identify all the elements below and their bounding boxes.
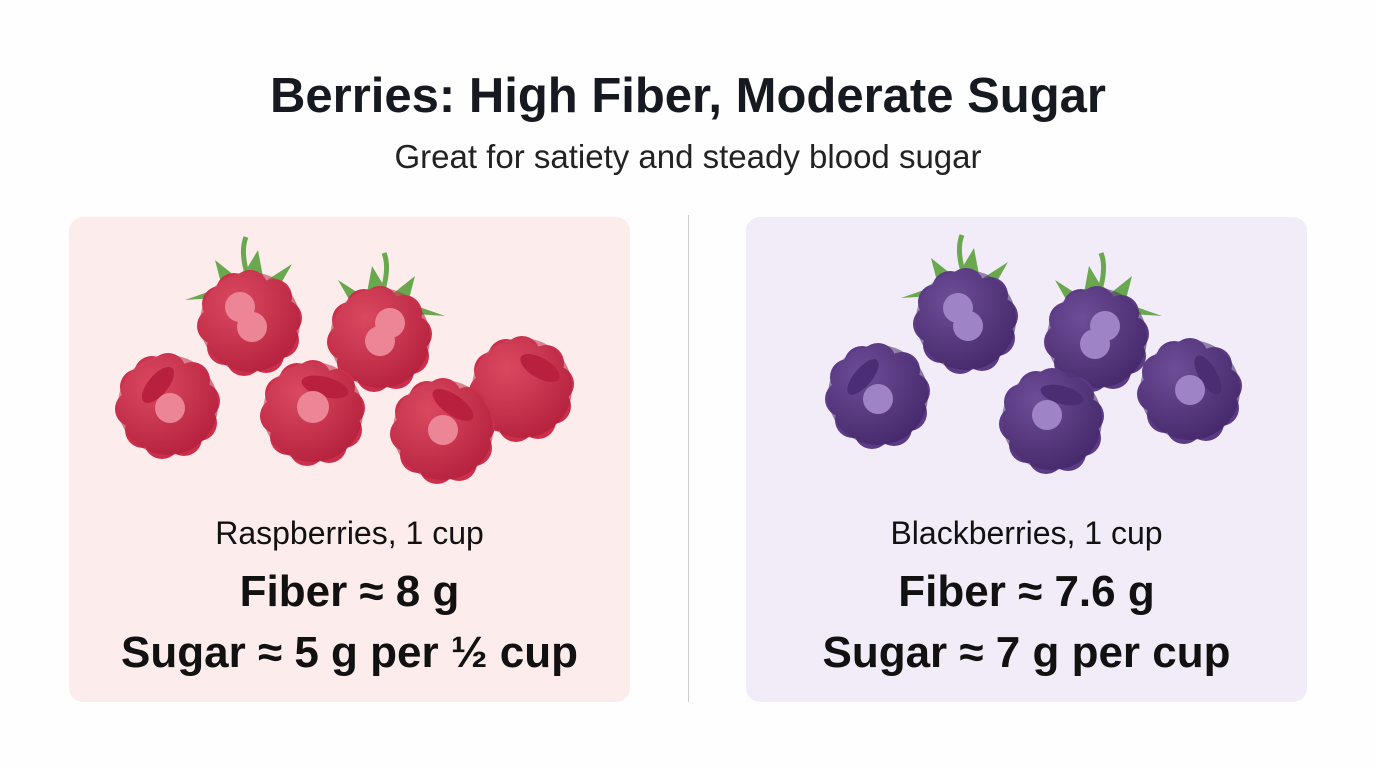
stat: sugar: Sugar ≈ 5 g per ½ cup	[121, 628, 578, 677]
label: raspberries: Raspberries, 1 cup	[215, 515, 484, 551]
panel: raspberries	[69, 217, 630, 702]
stat: fiber: Fiber ≈ 7.6 g	[898, 567, 1155, 616]
divider	[688, 215, 689, 702]
subtitle: Great for satiety and steady blood sugar	[394, 138, 982, 175]
panel: blackberries	[746, 217, 1307, 702]
stat: fiber: Fiber ≈ 8 g	[240, 567, 459, 616]
illustration: blackberries	[825, 234, 1242, 474]
label: blackberries: Blackberries, 1 cup	[890, 515, 1163, 551]
illustration: raspberries	[115, 236, 574, 484]
stat: sugar: Sugar ≈ 7 g per cup	[822, 628, 1230, 677]
title: Berries: High Fiber, Moderate Sugar	[270, 69, 1106, 123]
